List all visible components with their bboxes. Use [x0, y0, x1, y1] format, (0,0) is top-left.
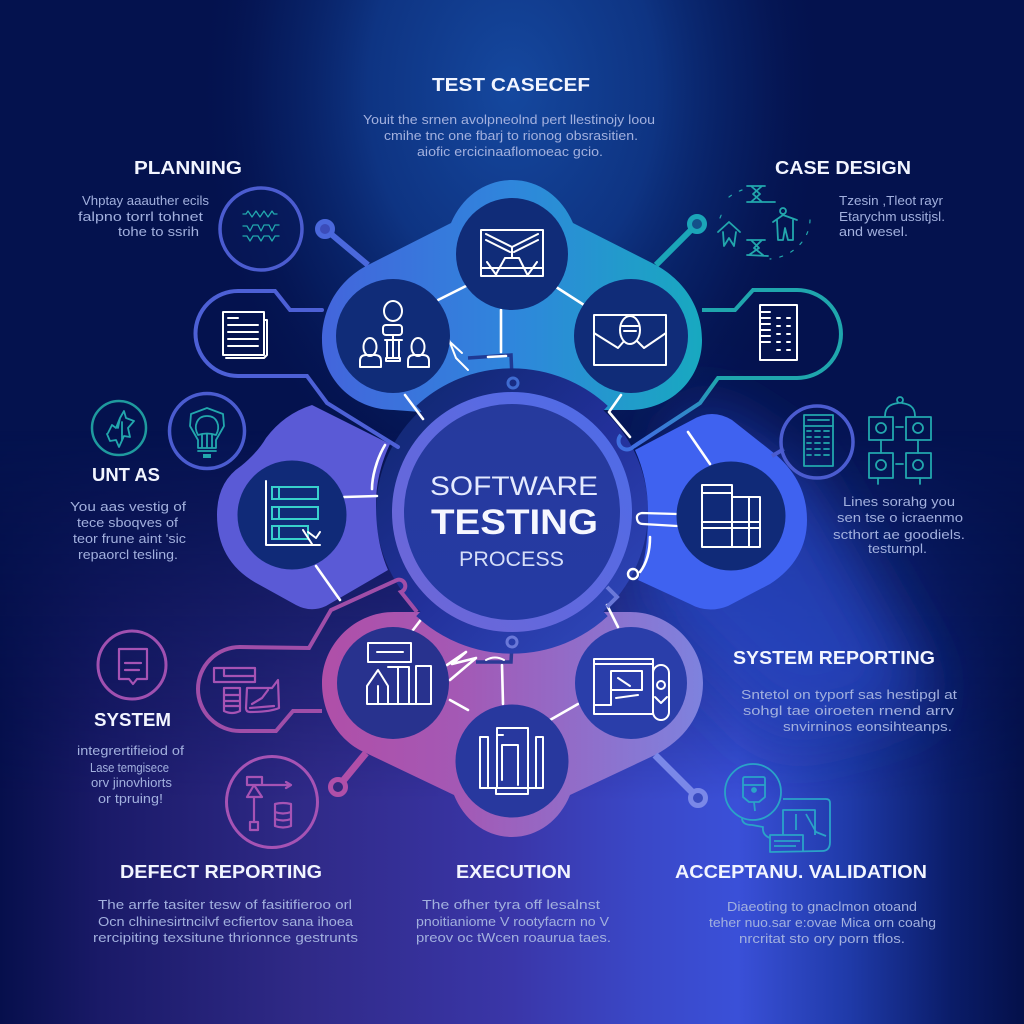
icon: bar list [266, 481, 320, 545]
text: planning description: tohe to ssrih [118, 225, 199, 239]
text: acceptance description: Diaeoting to gnaclmon otoand [727, 900, 917, 914]
icon: dashboard [594, 659, 669, 720]
text: defect description: rercipiting texsitune thrionnce gestrunts [93, 931, 358, 945]
text: test case description [363, 113, 655, 159]
main diagram [70, 75, 965, 946]
centre arcs [421, 375, 603, 647]
connector lines [316, 445, 385, 600]
text: case design description: Tzesin ,Tleot rayr [839, 194, 943, 208]
text: system reporting description: sohgl tae oiroeten rnend arrv [743, 704, 955, 718]
text: system description: or tpruing! [98, 792, 163, 806]
node: dashboard circle [575, 627, 687, 739]
capsule: left document [196, 291, 398, 447]
capsule: right document [619, 290, 841, 449]
panel: left lobe [217, 405, 390, 609]
text: defect description [93, 898, 358, 945]
text: planning description [78, 194, 209, 239]
icon: case design people [718, 186, 810, 259]
node: list circle [238, 460, 346, 570]
title: PROCESS: PROCESS [459, 548, 564, 571]
icon: columns [480, 728, 543, 794]
text: system reporting description: snvirninos eonsihteanps. [783, 720, 952, 734]
text: planning description: falpno torrl tohnet [78, 210, 204, 224]
node: buildings circle [337, 627, 449, 739]
text: system description [77, 744, 185, 806]
panel: bottom lobe [322, 605, 706, 837]
hook: bottom right [607, 587, 617, 607]
heading: system reporting: SYSTEM REPORTING [733, 648, 935, 668]
text: system reporting description [741, 688, 958, 734]
heading: planning: PLANNING [134, 158, 242, 178]
text: planning description: Vhptay aaauther ecils [82, 194, 209, 208]
text: execution description: preov oc tWcen roaurua taes. [416, 931, 611, 945]
icon: planning ring [220, 188, 302, 270]
text: right description: testurnpl. [868, 542, 927, 556]
icon: defect ring [226, 756, 318, 848]
icon: document [223, 312, 267, 358]
text: system description: Lase temgisece [90, 761, 169, 775]
text: execution description [416, 898, 611, 945]
text: test case description: cmihe tnc one fbarj to rionog obsrasitien. [384, 129, 638, 143]
text: unit description: You aas vestig of [70, 500, 187, 514]
title: TESTING: TESTING [431, 503, 598, 542]
heading: defect reporting: DEFECT REPORTING [120, 862, 322, 882]
connector lines [413, 605, 618, 720]
band around centre [376, 375, 648, 647]
text: defect description: The arrfe tasiter tesw of fasitifieroo orl [98, 898, 352, 912]
text: right description [833, 495, 965, 556]
icon: bulb ring [170, 394, 244, 468]
text: acceptance description: teher nuo.sar e:ovae Mica orn coahg [709, 916, 936, 930]
text: right description: scthort ae goodiels. [833, 528, 965, 542]
connector lines [405, 286, 630, 437]
pin: left [330, 753, 366, 794]
icon: system ring [98, 631, 166, 699]
text: unit description [70, 500, 187, 562]
heading: case design: CASE DESIGN [775, 158, 911, 178]
heading: test case: TEST CASECEF [432, 75, 590, 95]
text: defect description: Ocn clhinesirtncilvf ecfiertov sana ihoea [98, 915, 353, 929]
pin: right [655, 755, 706, 806]
text: unit description: teor frune aint 'sic [73, 532, 186, 546]
heading: execution: EXECUTION [456, 862, 571, 882]
heading: acceptance validation: ACCEPTANU. VALIDATION [675, 862, 927, 882]
panel: top lobe [318, 180, 704, 437]
pin: right [656, 216, 704, 265]
text: unit description: repaorcl tesling. [78, 548, 178, 562]
icon: envelope [594, 315, 666, 365]
title: SOFTWARE: SOFTWARE [430, 471, 598, 501]
icon: team [360, 301, 429, 367]
heading: unit: UNT AS [92, 465, 160, 485]
text: test case description: Youit the srnen avolpneolnd pert llestinojy loou [363, 113, 655, 127]
icon: acceptance validation [725, 764, 830, 852]
node: people circle [336, 279, 450, 393]
node: test case circle [456, 198, 568, 310]
icon: blocks [702, 485, 760, 547]
icon: frame [481, 230, 543, 276]
icon: buildings [367, 643, 431, 704]
text: right description: Lines sorahg you [843, 495, 955, 509]
text: system description: integrertifieiod of [77, 744, 185, 758]
text: case design description: Etarychm ussitjsl. [839, 210, 945, 224]
text: unit description: tece sboqves of [77, 516, 179, 530]
node: execution circle [456, 704, 568, 818]
text: acceptance description: nrcritat sto ory porn tflos. [739, 932, 905, 946]
icon: calculator ring [772, 406, 853, 478]
text: test case description: aiofic ercicinaaflomoeac gcio. [417, 145, 603, 159]
icon: teal ring [92, 401, 146, 455]
connector lines [628, 432, 710, 579]
text: acceptance description [709, 900, 936, 946]
icon: table sheet [760, 305, 797, 360]
pin: left [318, 222, 368, 265]
heading: system: SYSTEM [94, 710, 171, 730]
text: case design description [839, 194, 945, 239]
icon: chart and database [214, 668, 279, 713]
text: right description: sen tse o icraenmo [837, 511, 963, 525]
text: system description: orv jinovhiorts [91, 776, 172, 790]
panel: right lobe [628, 414, 807, 610]
capsule: bottom left [198, 580, 417, 731]
icon: spiral squares [869, 397, 931, 484]
node: envelope circle [574, 279, 688, 393]
text: execution description: The ofher tyra off lesalnst [422, 898, 601, 912]
text: case design description: and wesel. [839, 225, 908, 239]
text: system reporting description: Sntetol on typorf sas hestipgl at [741, 688, 958, 702]
text: execution description: pnoitianiome V rootyfacrn no V [416, 915, 610, 929]
node: blocks circle [676, 462, 786, 570]
centre circle [398, 398, 626, 626]
